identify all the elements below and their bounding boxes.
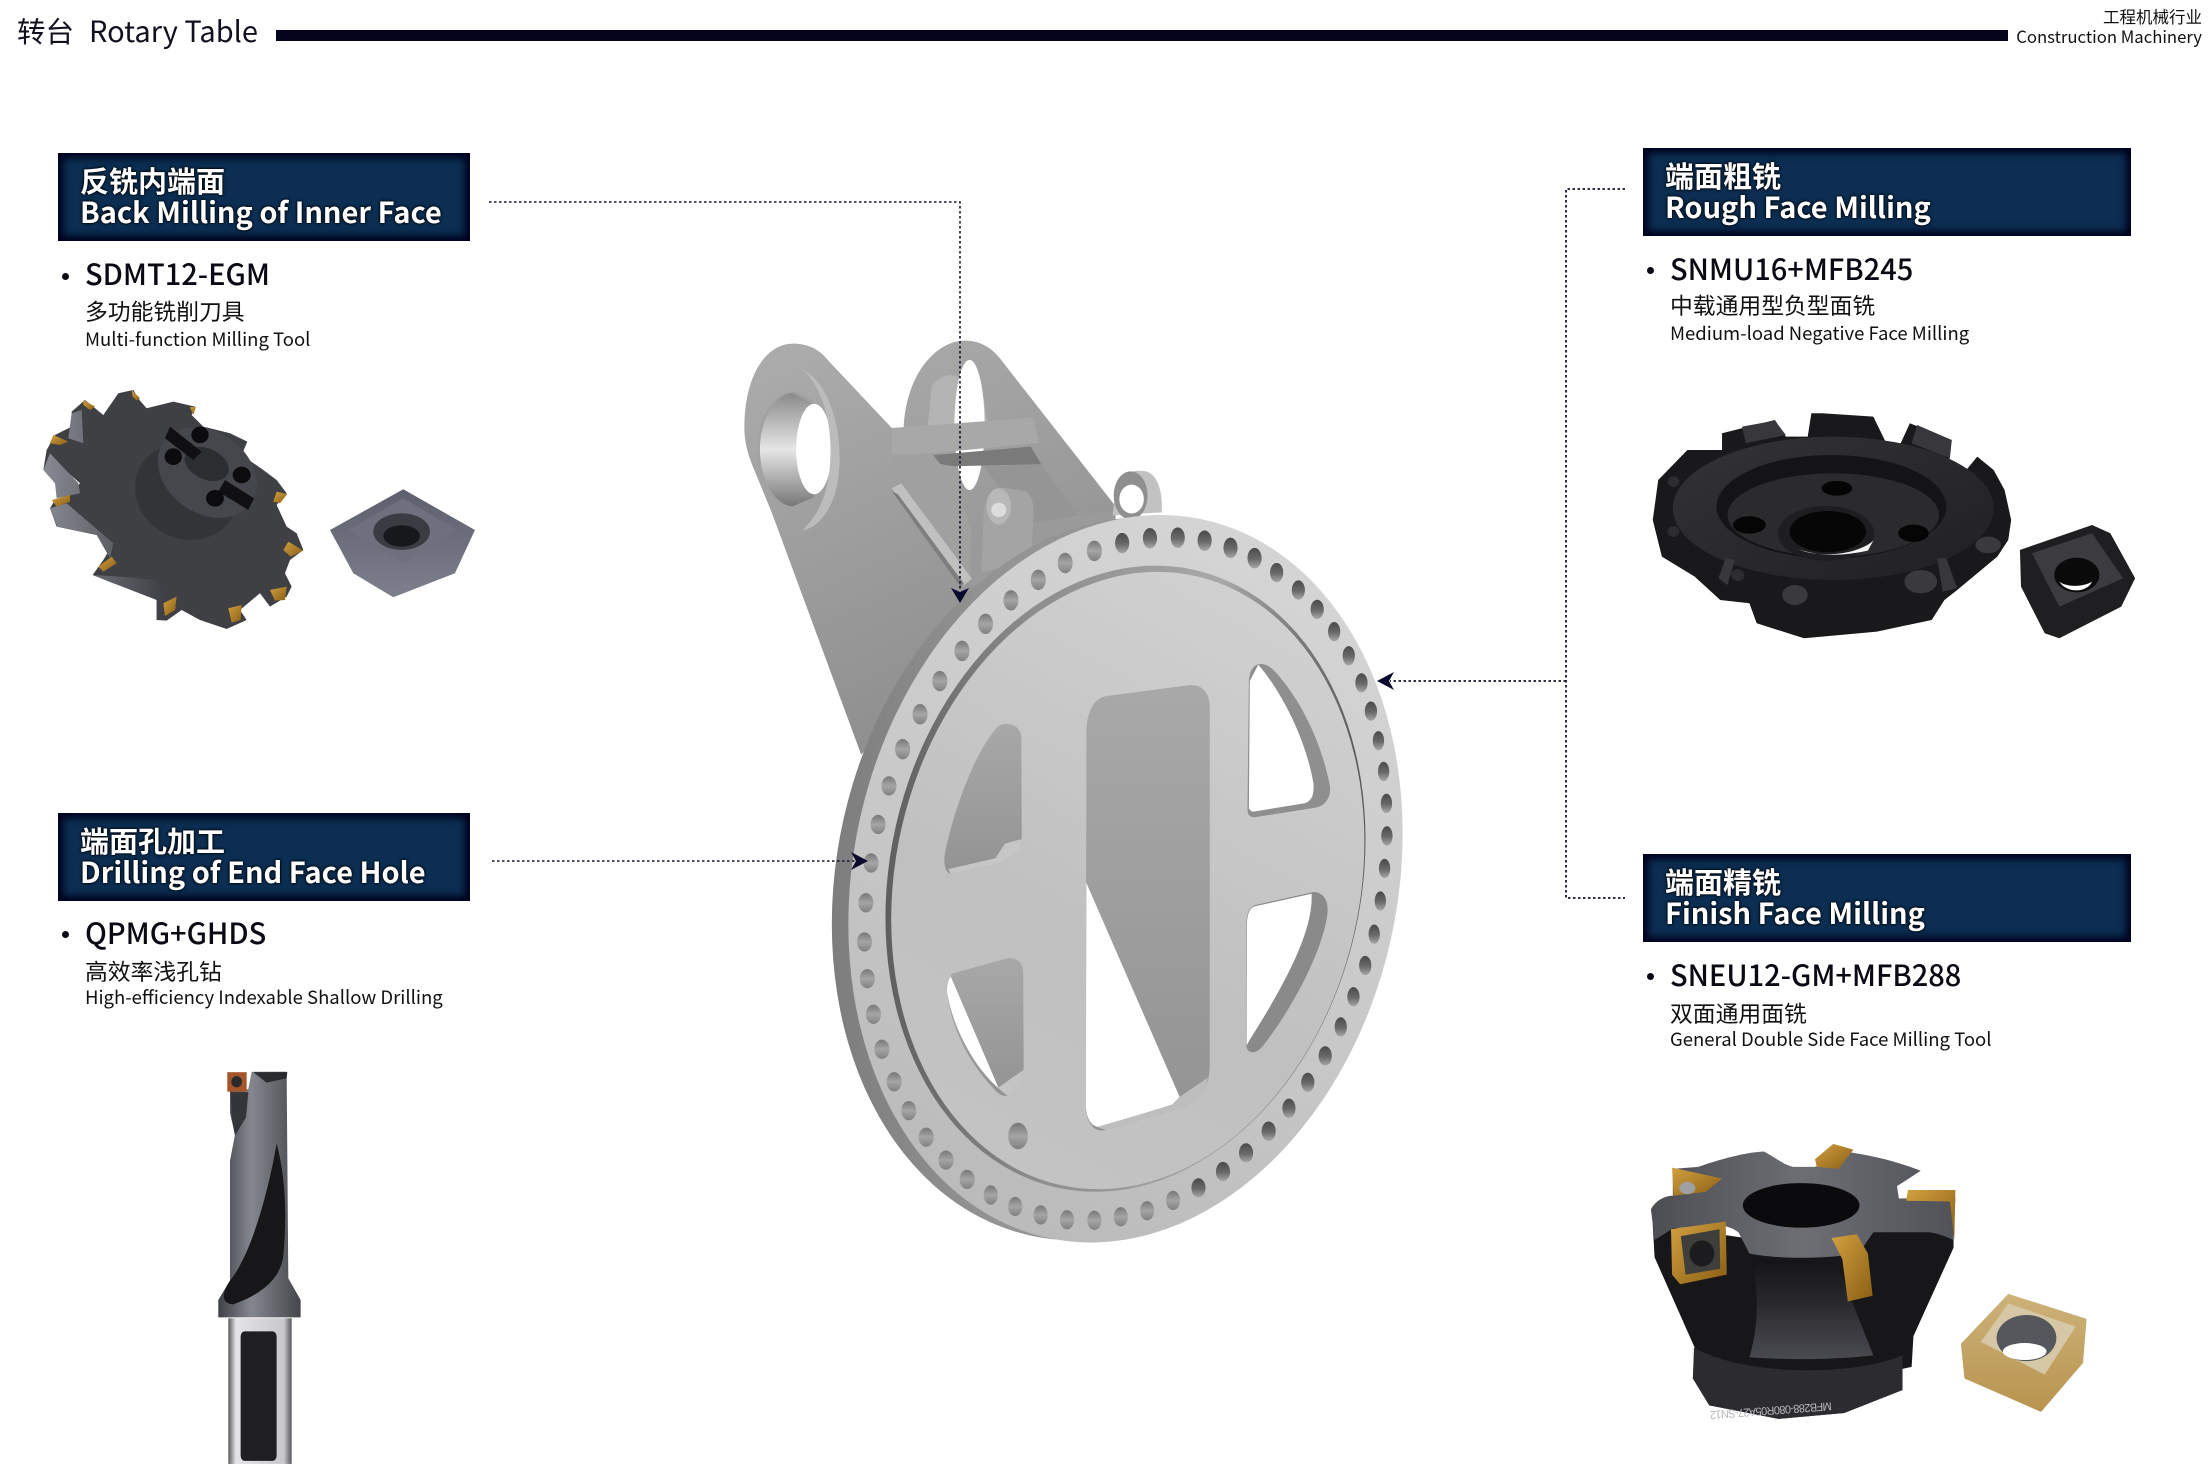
text block: SNMU16+MFB245: SNMU16+MFB245 — [1670, 247, 1913, 289]
text block: SDMT12-EGM: Multi-function Milling Tool — [85, 326, 310, 352]
disc front face — [848, 472, 1403, 1285]
text block: SNMU16+MFB245: 中载通用型负型面铣 — [1670, 288, 1875, 321]
tool image: drill — [218, 1072, 301, 1464]
text block: SNEU12-GM+MFB288: General Double Side Face Milling Tool — [1670, 1026, 1992, 1052]
panel heading: finish face milling — [1643, 854, 2131, 942]
header title: 转台 Rotary Table — [17, 9, 258, 51]
panel heading: rough face milling — [1643, 148, 2131, 236]
arrow: back milling — [951, 588, 969, 603]
tool image: finish face mill cutter — [1651, 1144, 1955, 1420]
panel heading: rough face milling: Rough Face Milling — [1665, 185, 1931, 227]
text block: SNMU16+MFB245: Medium-load Negative Face Milling — [1670, 320, 1969, 346]
tool image: back milling cutter — [43, 390, 303, 629]
arrow: drilling — [851, 852, 868, 870]
text block: SDMT12-EGM: 多功能铣削刀具 — [85, 294, 245, 327]
text block: SNEU12-GM+MFB288: 双面通用面铣 — [1670, 996, 1807, 1029]
window: lower left — [947, 958, 1024, 1096]
text block: SDMT12-EGM: SDMT12-EGM — [85, 252, 270, 294]
text block: QPMG+GHDS: 高效率浅孔钻 — [85, 954, 222, 987]
arrow: face milling — [1377, 672, 1394, 690]
tool image: back milling insert — [330, 489, 475, 597]
text block: SNEU12-GM+MFB288 — [1647, 953, 1992, 1052]
panel heading: drilling: Drilling of End Face Hole — [80, 850, 426, 892]
window: upper left — [944, 724, 1022, 874]
tool image: rough face mill cutter — [1653, 413, 2011, 638]
top lifting lug — [1113, 471, 1162, 520]
leader lines: right bracket — [1390, 189, 1625, 898]
tool image: finish face mill insert — [1961, 1294, 2087, 1412]
text block: QPMG+GHDS — [62, 911, 443, 1010]
inner plate — [891, 536, 1364, 1225]
tool image: rough face mill insert — [2020, 525, 2135, 638]
header category — [2016, 4, 2202, 48]
panel heading: finish face milling: 端面精铣 — [1665, 860, 1781, 902]
small lug — [981, 488, 1034, 573]
leader line: drilling — [492, 860, 856, 862]
text block: SNMU16+MFB245 — [1647, 247, 1969, 346]
bolt hole ring — [857, 527, 1393, 1230]
disc side thickness — [832, 475, 1386, 1283]
panel heading: finish face milling: Finish Face Milling — [1665, 891, 1925, 933]
header category: Construction Machinery — [2016, 24, 2202, 48]
window: lower right — [1246, 892, 1328, 1052]
panel heading: rough face milling: 端面粗铣 — [1665, 154, 1781, 196]
bracket behind disc — [744, 341, 1116, 755]
text block: QPMG+GHDS: QPMG+GHDS — [85, 911, 266, 953]
panel heading: back milling — [58, 153, 470, 241]
window: centre — [1086, 685, 1210, 1131]
panel heading: back milling: Back Milling of Inner Face — [80, 190, 442, 232]
rotary table part — [744, 341, 1403, 1285]
text block: QPMG+GHDS: High-efficiency Indexable Shallow Drilling — [85, 984, 443, 1010]
groove ring — [885, 529, 1365, 1229]
window: upper right — [1247, 664, 1330, 817]
text block: SNEU12-GM+MFB288: SNEU12-GM+MFB288 — [1670, 953, 1961, 995]
header rule — [276, 30, 2008, 41]
text block: SDMT12-EGM — [62, 252, 310, 352]
header category: 工程机械行业 — [2103, 4, 2202, 28]
leader line: back milling — [489, 202, 960, 590]
tool image: finish face mill cutter: MFB288-080R05A27-SN12 — [1709, 1399, 1832, 1420]
panel heading: back milling: 反铣内端面 — [80, 159, 225, 201]
panel heading: drilling — [58, 813, 470, 901]
panel heading: drilling: 端面孔加工 — [80, 819, 225, 861]
